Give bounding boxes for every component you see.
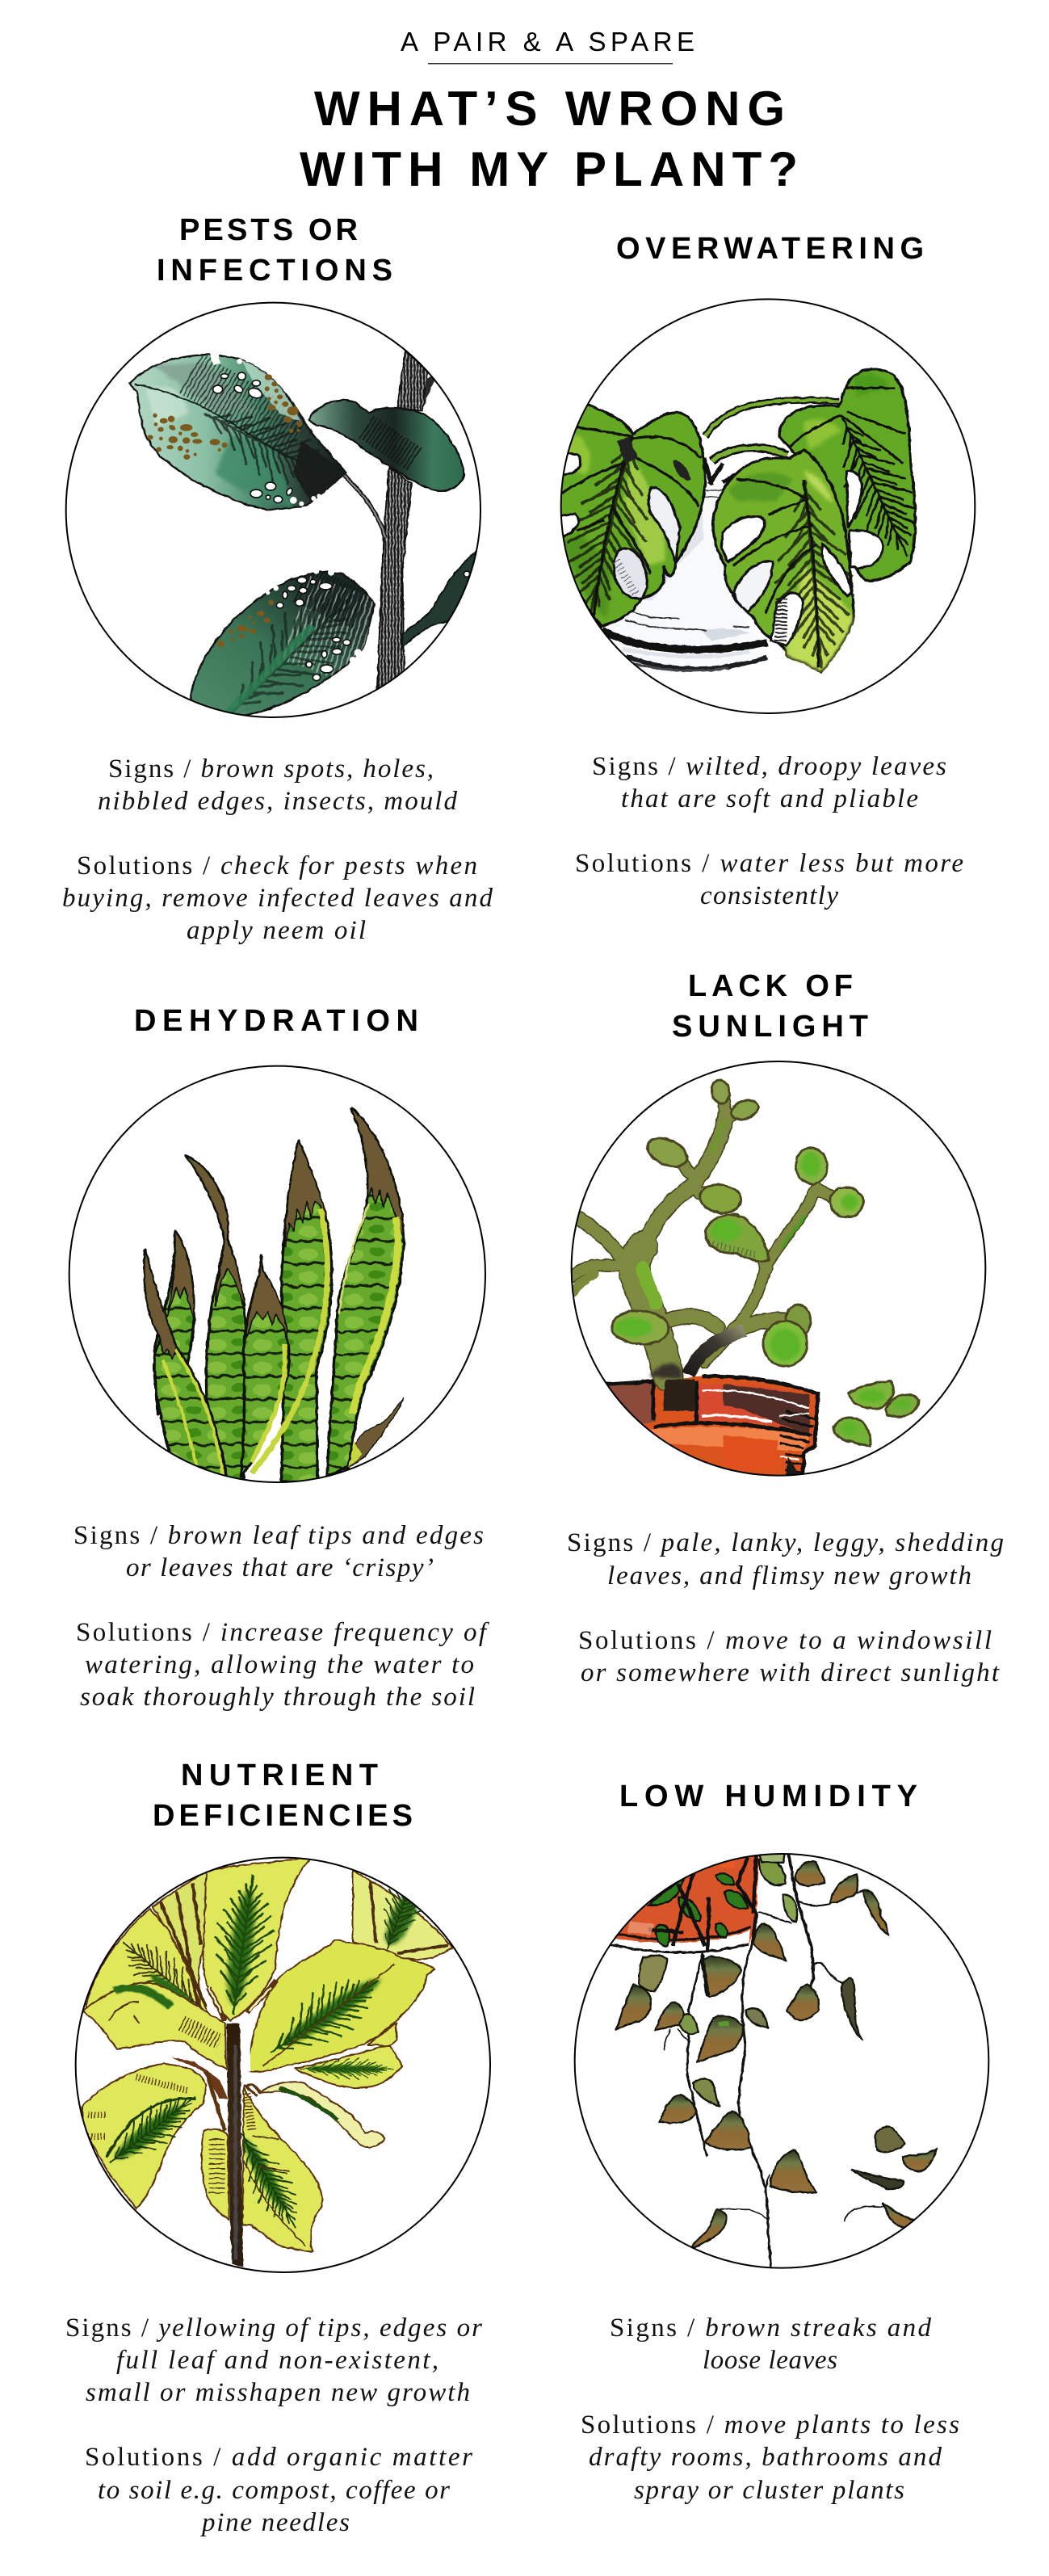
title: WITH MY PLANT? xyxy=(300,142,798,196)
text: low humidity signs and solutions: loose leaves xyxy=(703,2346,837,2375)
heading: low humidity: LOW HUMIDITY xyxy=(619,1780,917,1813)
title: WHAT’S WRONG xyxy=(314,82,785,136)
heading: overwatering: OVERWATERING xyxy=(616,232,924,266)
panel: low humidity xyxy=(575,1780,988,2505)
text: pests or infections signs and solutions: nibbled edges, insects, mould xyxy=(98,787,457,816)
text: lack of sunlight signs and solutions: Solutions / move to a windowsill xyxy=(578,1626,992,1655)
text: pests or infections signs and solutions: Signs / brown spots, holes, xyxy=(108,754,434,784)
leaves xyxy=(611,1078,918,1446)
text: lack of sunlight signs and solutions: leaves, and flimsy new growth xyxy=(607,1561,971,1591)
text: low humidity signs and solutions: drafty rooms, bathrooms and xyxy=(589,2443,942,2472)
center leaf xyxy=(713,450,854,672)
brand name: A PAIR & A SPARE xyxy=(401,27,694,57)
text: low humidity signs and solutions: Signs / brown streaks and xyxy=(610,2313,932,2343)
text: nutrient deficiencies signs and solutions: small or misshapen new growth xyxy=(86,2378,470,2407)
heading: lack of sunlight: SUNLIGHT xyxy=(672,1010,868,1044)
heading: pests or infections: INFECTIONS xyxy=(157,254,392,288)
heading: lack of sunlight: LACK OF xyxy=(688,969,853,1003)
illustration: snake plant with brown tips xyxy=(69,1066,485,1484)
back right leaf xyxy=(779,369,915,581)
text: lack of sunlight signs and solutions xyxy=(567,1528,1004,1687)
illustration: yellowing fiddle-leaf plant xyxy=(76,1856,490,2272)
green veining xyxy=(279,1973,384,2051)
title xyxy=(300,82,798,196)
text: nutrient deficiencies signs and solutions: Solutions / add organic matter xyxy=(85,2443,472,2472)
text: nutrient deficiencies signs and solutions: pine needles xyxy=(200,2508,350,2537)
text: pests or infections signs and solutions: apply neem oil xyxy=(187,916,366,945)
panel: overwatering xyxy=(552,232,975,910)
text: nutrient deficiencies signs and solutions: Signs / yellowing of tips, edges or xyxy=(65,2313,482,2343)
illustration: hanging pothos losing leaves xyxy=(575,1851,988,2268)
heading: pests or infections: PESTS OR xyxy=(179,213,358,247)
vines xyxy=(664,1853,883,2267)
text: nutrient deficiencies signs and solutions: to soil e.g. compost, coffee or xyxy=(98,2476,450,2505)
nibbled edges xyxy=(210,351,362,663)
leaf holes xyxy=(213,372,470,681)
text: pests or infections signs and solutions xyxy=(62,754,493,945)
text: lack of sunlight signs and solutions: or somewhere with direct sunlight xyxy=(581,1658,1000,1687)
text: low humidity signs and solutions: Solutions / move plants to less xyxy=(581,2410,959,2439)
heading: pests or infections xyxy=(157,213,392,288)
side shoots and white gap xyxy=(209,1980,276,2020)
branches xyxy=(573,1093,841,1376)
pot xyxy=(643,1376,816,1475)
left leaf xyxy=(559,404,705,626)
text: dehydration signs and solutions: Solutions / increase frequency of xyxy=(76,1618,489,1647)
text: low humidity signs and solutions xyxy=(581,2313,959,2505)
text: dehydration signs and solutions xyxy=(73,1521,489,1712)
brown spots xyxy=(147,374,303,647)
text: low humidity signs and solutions: spray or cluster plants xyxy=(634,2476,904,2505)
illustration: monstera in white pot xyxy=(552,299,975,713)
text: overwatering signs and solutions: that are soft and pliable xyxy=(621,784,918,813)
illustration: spotted rubber plant xyxy=(66,303,480,738)
text: overwatering signs and solutions: consistently xyxy=(700,881,838,910)
text: overwatering signs and solutions: Solutions / water less but more xyxy=(575,849,963,878)
heading: nutrient deficiencies: NUTRIENT xyxy=(181,1759,378,1792)
text: overwatering signs and solutions xyxy=(575,752,963,910)
text: nutrient deficiencies signs and solutions: full leaf and non-existent, xyxy=(116,2346,438,2375)
hanging pot xyxy=(606,1853,759,1952)
text: pests or infections signs and solutions: buying, remove infected leaves and xyxy=(62,884,493,913)
dark stem and soil block xyxy=(688,1330,745,1375)
text: dehydration signs and solutions: or leaves that are ‘crispy’ xyxy=(126,1553,434,1582)
text: overwatering signs and solutions: Signs / wilted, droopy leaves xyxy=(592,752,946,781)
heading: lack of sunlight xyxy=(672,969,868,1044)
heading: nutrient deficiencies: DEFICIENCIES xyxy=(153,1799,413,1833)
heading: nutrient deficiencies xyxy=(153,1759,413,1833)
panel: nutrient deficiencies xyxy=(65,1759,490,2537)
heading: dehydration: DEHYDRATION xyxy=(134,1004,418,1038)
illustration: leggy succulent in terracotta pot xyxy=(572,1061,985,1481)
text: dehydration signs and solutions: watering, allowing the water to xyxy=(85,1650,474,1679)
text: lack of sunlight signs and solutions: Signs / pale, lanky, leggy, shedding xyxy=(567,1528,1004,1557)
text: dehydration signs and solutions: soak thoroughly through the soil xyxy=(80,1683,475,1712)
panel: dehydration xyxy=(69,1004,489,1712)
text: dehydration signs and solutions: Signs / brown leaf tips and edges xyxy=(73,1521,484,1550)
leaves xyxy=(616,1862,937,2249)
panel: lack of sunlight xyxy=(567,969,1004,1687)
main stem xyxy=(226,2023,243,2267)
text: nutrient deficiencies signs and solutions xyxy=(65,2313,482,2537)
text: pests or infections signs and solutions: Solutions / check for pests when xyxy=(77,851,477,880)
panel: pests or infections xyxy=(62,213,493,945)
